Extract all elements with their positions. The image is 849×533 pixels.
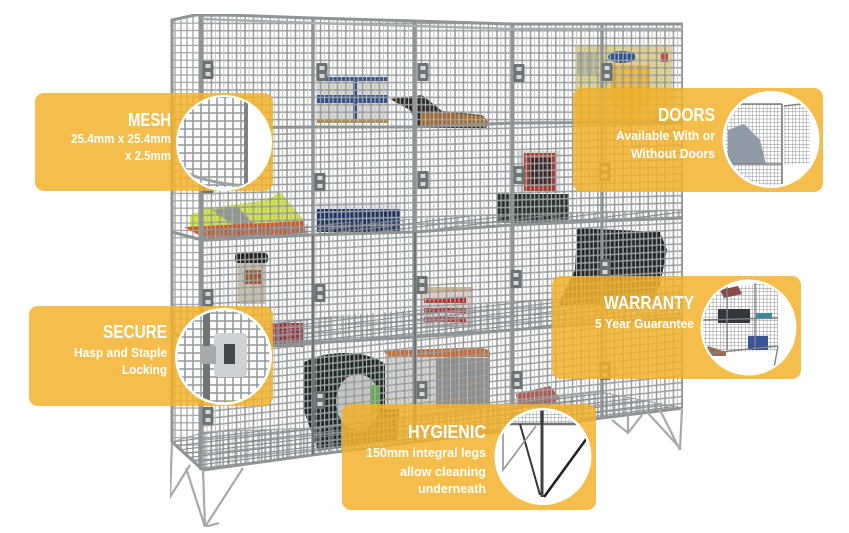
description: 25.4mm x 25.4mm bbox=[71, 131, 171, 146]
blue and white boxes bbox=[317, 77, 388, 123]
panel background bbox=[342, 404, 596, 510]
description: Locking bbox=[122, 362, 167, 377]
description bbox=[366, 445, 486, 496]
wire mesh locker unit bbox=[170, 14, 683, 527]
black bag bbox=[558, 228, 667, 305]
description bbox=[616, 128, 715, 161]
red bundle bbox=[516, 386, 560, 408]
panel background bbox=[573, 88, 823, 192]
description: 150mm integral legs bbox=[366, 445, 486, 460]
heading: DOORS bbox=[658, 105, 715, 125]
second row mesh bbox=[202, 122, 683, 240]
reflective strip bbox=[212, 207, 260, 233]
circular photo: mesh detail bbox=[176, 95, 272, 191]
black reel bbox=[304, 353, 400, 451]
circular photo: hasp lock bbox=[175, 308, 272, 405]
floor mesh bbox=[172, 392, 683, 470]
description bbox=[74, 345, 167, 377]
panel: secure bbox=[29, 306, 273, 406]
red tool box bbox=[517, 151, 560, 193]
side mesh panel bbox=[172, 14, 203, 470]
panel: doors bbox=[573, 88, 823, 192]
panel background bbox=[552, 276, 801, 379]
panel background bbox=[29, 306, 273, 406]
panel: hygienic bbox=[342, 404, 596, 510]
hi-vis vest bbox=[190, 191, 303, 232]
heading: WARRANTY bbox=[604, 293, 694, 313]
jar with black lid bbox=[235, 253, 268, 304]
panel: warranty bbox=[552, 276, 801, 379]
red boxed item bbox=[420, 287, 473, 328]
wire shelf bands bbox=[202, 210, 683, 350]
panel: mesh bbox=[35, 93, 273, 191]
third row mesh bbox=[202, 218, 683, 350]
description: Hasp and Staple bbox=[74, 345, 167, 360]
EAR box bbox=[575, 45, 672, 125]
heading: SECURE bbox=[103, 322, 167, 342]
stored items behind the mesh bbox=[184, 45, 672, 451]
description: x 2.5mm bbox=[125, 148, 171, 163]
heading: MESH bbox=[128, 110, 171, 130]
bottom row mesh bbox=[202, 318, 683, 470]
description: underneath bbox=[418, 481, 486, 496]
frame bbox=[172, 14, 683, 470]
panel background bbox=[35, 93, 273, 191]
top row mesh bbox=[202, 14, 683, 128]
circular photo: open locker door bbox=[722, 91, 820, 189]
description bbox=[71, 131, 171, 163]
boot bbox=[390, 95, 489, 128]
navy box on shelf bbox=[317, 202, 400, 232]
orange and grey box bbox=[383, 347, 490, 409]
circular photo: integral legs bbox=[494, 408, 592, 505]
description: allow cleaning bbox=[400, 464, 486, 479]
orange tray bbox=[184, 221, 306, 241]
heading: HYGIENIC bbox=[408, 422, 486, 442]
description: 5 Year Guarantee bbox=[595, 316, 694, 331]
red case bbox=[272, 323, 303, 347]
circular photo: small locker bbox=[700, 280, 796, 376]
description: Available With or bbox=[616, 128, 715, 143]
description: Without Doors bbox=[631, 146, 715, 161]
dark stacked bins bbox=[497, 194, 569, 223]
legs bbox=[170, 408, 682, 527]
door hasps bbox=[202, 61, 612, 425]
